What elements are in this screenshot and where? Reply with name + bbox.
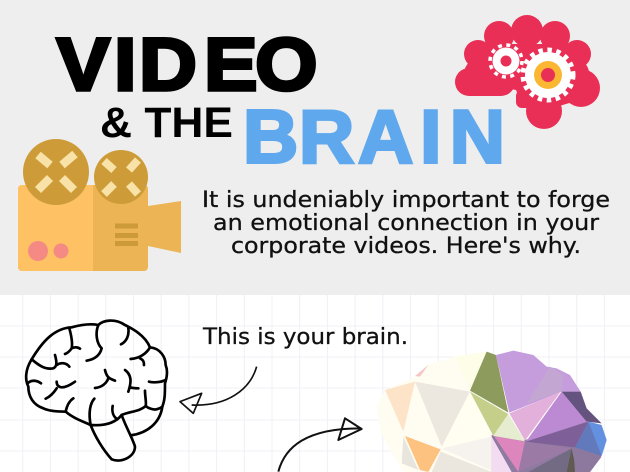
title: & THE: & THE — [100, 99, 233, 147]
icon: film projector camera — [18, 139, 181, 271]
icon: line-art brain — [26, 321, 167, 460]
large gear — [523, 50, 573, 100]
intro text: It is undeniably important to forge — [202, 187, 610, 213]
intro text — [202, 187, 610, 259]
intro text: an emotional connection in your — [213, 210, 600, 236]
arrow: to colourful brain — [278, 418, 362, 472]
intro text: corporate videos. Here's why. — [231, 233, 581, 259]
small film reel — [94, 150, 148, 204]
arrow: to line-art brain — [180, 367, 257, 413]
large film reel — [23, 139, 89, 205]
icon: low-poly colourful brain — [377, 351, 607, 472]
lens — [148, 201, 181, 253]
icon: red brain with gears — [455, 15, 600, 129]
small gear — [490, 45, 522, 77]
vent lines — [115, 224, 138, 246]
caption: This is your brain.: This is your brain. — [202, 324, 408, 350]
indicator lights — [28, 241, 48, 261]
panel: header background — [0, 0, 630, 295]
title: VIDEO: VIDEO — [57, 24, 317, 106]
camera body — [18, 185, 148, 271]
title: BRAIN: BRAIN — [243, 95, 505, 179]
